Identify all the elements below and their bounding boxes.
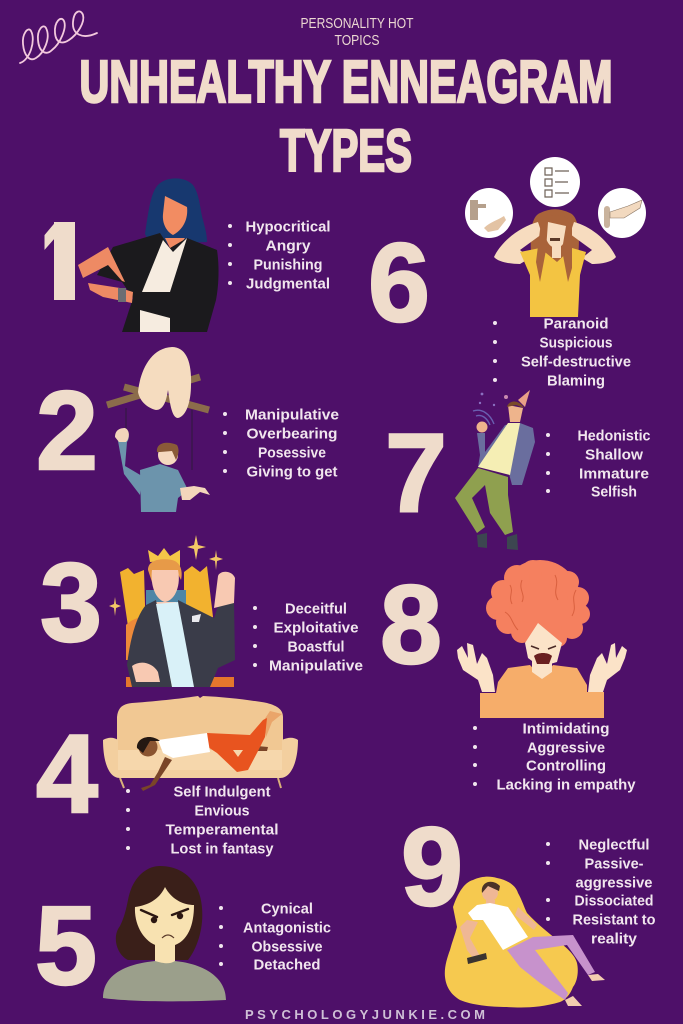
trait list: Antagonistic [243, 920, 331, 936]
trait list: Immature [579, 466, 649, 482]
trait list: Cynical [261, 900, 313, 918]
footer: website: PSYCHOLOGYJUNKIE.COM [245, 1007, 485, 1022]
trait list: Self Indulgent [174, 784, 270, 800]
panel: type 2 [36, 347, 339, 512]
trait list: Lacking in empathy [496, 776, 636, 794]
trait list: Angry [266, 238, 311, 254]
trait list [546, 428, 650, 500]
trait list: Aggressive [527, 740, 605, 756]
trait list: Resistant to [572, 912, 656, 928]
trait list: Exploitative [274, 620, 358, 636]
icon: decorative squiggle [20, 11, 97, 63]
trait list: Envious [194, 802, 250, 820]
trait list [473, 720, 636, 794]
number 1 [44, 222, 75, 300]
trait list [253, 600, 363, 674]
trait list: Deceitful [285, 600, 347, 618]
number 5: 5 [35, 884, 97, 1008]
trait list: Intimidating [522, 720, 610, 738]
trait list: aggressive [576, 874, 652, 892]
trait list [228, 218, 330, 292]
trait list: Dissociated [574, 892, 654, 910]
trait list: Self-destructive [521, 354, 631, 370]
trait list: Detached [254, 956, 320, 974]
subtitle: PERSONALITY HOT [300, 15, 414, 32]
trait list [493, 316, 631, 390]
number 4: 4 [36, 712, 98, 836]
trait list: Punishing [254, 256, 322, 274]
trait list: Giving to get [246, 464, 338, 480]
panel: type 5 [35, 866, 331, 1008]
illustration: partying man with hat [455, 390, 535, 550]
trait list: Boastful [288, 638, 344, 656]
trait list: Blaming [547, 372, 605, 390]
trait list: Hedonistic [578, 428, 650, 444]
trait list: Passive- [584, 856, 644, 872]
trait list: Overbearing [246, 426, 338, 442]
trait list: Controlling [526, 758, 606, 774]
trait list: Obsessive [252, 938, 322, 956]
illustration: person lounging on a sofa [103, 696, 298, 791]
panel: type 8 [380, 560, 636, 794]
trait list: Suspicious [540, 334, 612, 352]
trait list [126, 784, 278, 858]
illustration: anxious woman with three worry bubbles [465, 157, 646, 317]
trait list: Manipulative [269, 658, 363, 674]
number 2: 2 [36, 369, 98, 493]
panel: type 3 [40, 535, 363, 687]
trait list [219, 900, 331, 974]
trait list: Selfish [591, 484, 637, 500]
number 1: 1 [41, 200, 75, 324]
number 7: 7 [385, 411, 447, 535]
panel: type 6 [368, 157, 646, 390]
number 9: 9 [401, 805, 463, 929]
illustration: hand controlling a puppet [107, 347, 210, 512]
title: TYPES [280, 118, 412, 184]
subtitle [300, 15, 414, 49]
trait list: reality [591, 930, 638, 948]
trait list: Judgmental [246, 276, 330, 292]
trait list: Posessive [258, 444, 326, 462]
trait list: Shallow [585, 446, 643, 464]
trait list: Manipulative [245, 406, 339, 424]
trait list [546, 836, 656, 948]
panel: type 7 [385, 390, 650, 550]
illustration: crowned man on a throne [109, 535, 235, 687]
curly hair [486, 560, 590, 647]
illustration: furious woman with wild red hair [457, 560, 627, 718]
number 6: 6 [368, 221, 430, 345]
number 3: 3 [40, 541, 102, 665]
subtitle: TOPICS [334, 32, 380, 49]
trait list: Lost in fantasy [170, 840, 274, 858]
title [80, 49, 612, 184]
illustration: skeptical woman [103, 866, 226, 1001]
number 8: 8 [380, 563, 442, 687]
trait list: Neglectful [578, 836, 650, 854]
panel: type 1 [41, 178, 330, 332]
illustration: woman pointing at her watch [78, 178, 219, 332]
illustration: man slouching on a beanbag [445, 877, 605, 1007]
panel: type 4 [36, 696, 298, 858]
trait list: Paranoid [544, 316, 608, 332]
panel: type 9 [401, 805, 656, 1007]
trait list [223, 406, 339, 480]
trait list: Hypocritical [246, 218, 330, 236]
trait list: Temperamental [166, 822, 278, 838]
